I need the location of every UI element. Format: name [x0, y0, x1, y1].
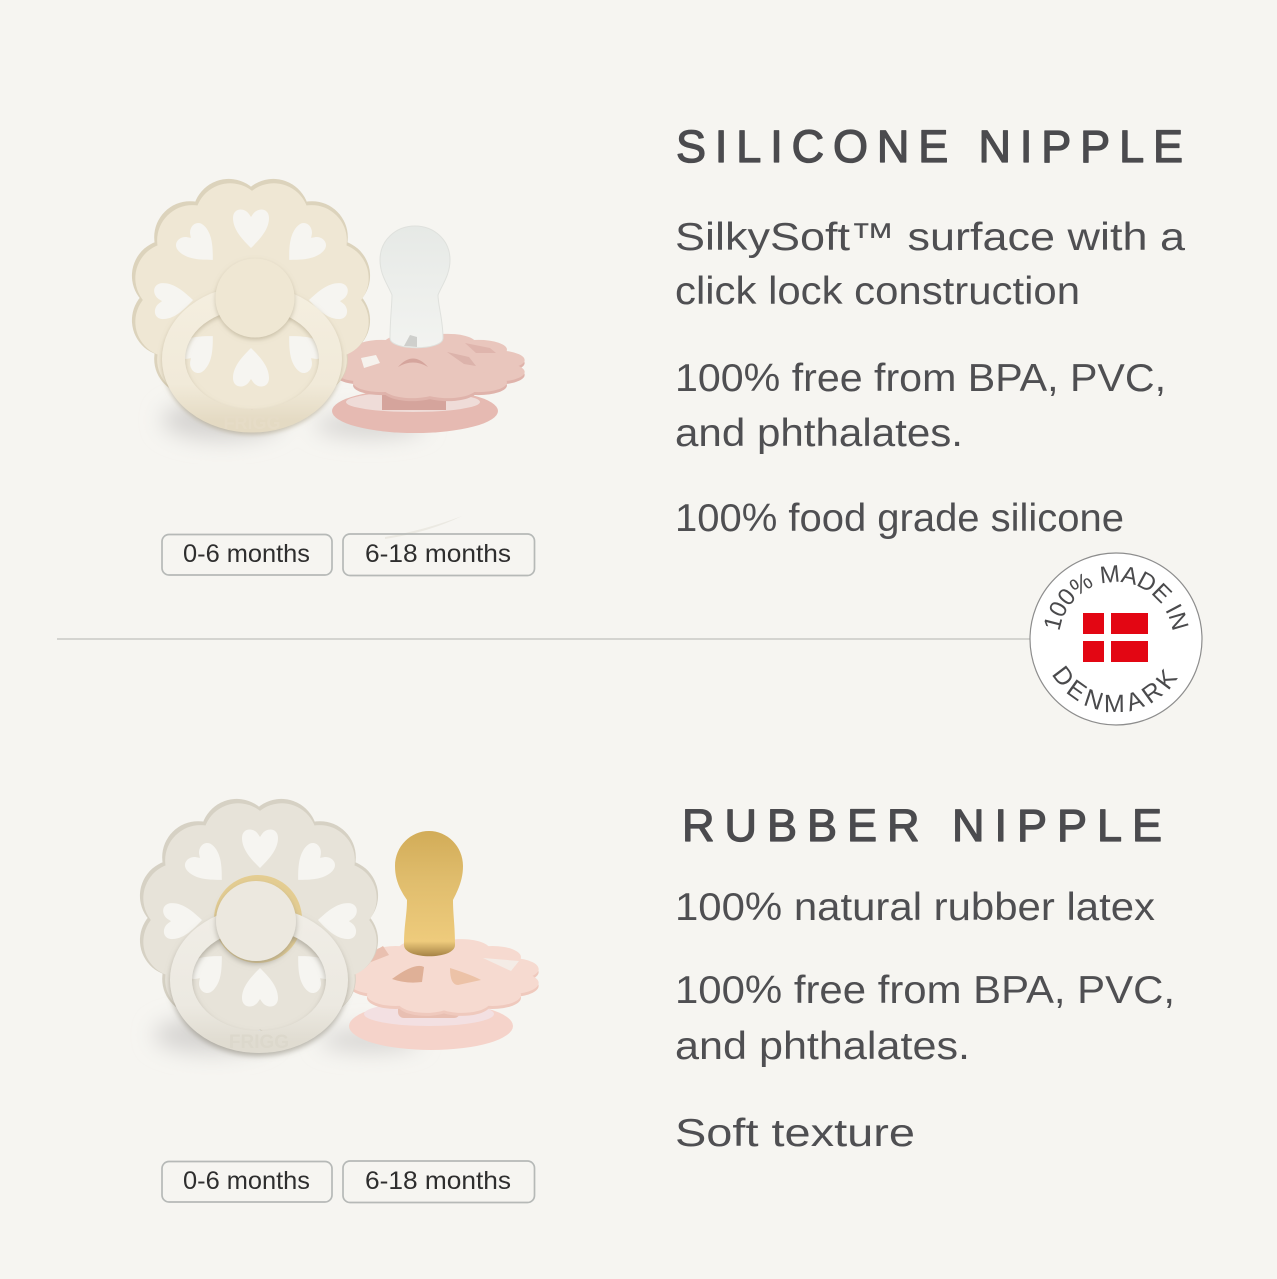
- panel: rubber nipple product: [132, 791, 545, 1053]
- panel: silicone nipple text: [675, 121, 1185, 540]
- heading: SILICONE NIPPLE: [676, 121, 1183, 172]
- faint smudge: [385, 516, 462, 539]
- text: free from: 100% free from BPA, PVC,: [675, 969, 1175, 1012]
- pink pacifier, silicone: [329, 226, 531, 433]
- badge: 100% made in Denmark: [1029, 552, 1203, 726]
- panel: silicone nipple product: [124, 171, 531, 440]
- tag: 6-18 months: [343, 1161, 534, 1202]
- badge top text: 100% MADE IN: [1044, 565, 1188, 630]
- FRIGG logo: FRIGG: [224, 413, 280, 433]
- tag: 0-6 months: 0-6 months: [183, 540, 310, 568]
- text: soft texture: Soft texture: [675, 1112, 915, 1155]
- tag: 0-6 months: [162, 534, 332, 575]
- divider line: [57, 638, 1032, 640]
- text: construction: click lock construction: [675, 270, 1080, 313]
- cream pacifier, rubber: [132, 791, 386, 1053]
- text: phthalates: and phthalates.: [675, 1025, 970, 1068]
- FRIGG logo: FRIGG: [229, 1032, 289, 1053]
- tag: 0-6 months: [162, 1162, 332, 1202]
- icon: Danish flag: [1083, 613, 1148, 662]
- panel: silicone age options: [162, 516, 534, 576]
- badge bottom text: DENMARK: [1052, 666, 1178, 712]
- panel: rubber nipple text: [675, 800, 1175, 1155]
- cream pacifier, silicone: [124, 171, 378, 433]
- text: free from: 100% free from BPA, PVC,: [675, 357, 1166, 400]
- tag: 6-18 months: 6-18 months: [365, 540, 511, 568]
- product shadow: [162, 400, 425, 440]
- tag: 6-18 months: 6-18 months: [365, 1167, 511, 1195]
- text: natural rubber: 100% natural rubber latex: [675, 886, 1156, 929]
- panel: rubber age options: [162, 1161, 534, 1202]
- product shadow: [154, 1017, 420, 1053]
- tag: 0-6 months: 0-6 months: [183, 1167, 310, 1195]
- tag: 6-18 months: [343, 534, 534, 576]
- text: surface: SilkySoft™ surface with a: [675, 216, 1185, 259]
- heading: RUBBER NIPPLE: [682, 800, 1162, 851]
- text: phthalates: and phthalates.: [675, 412, 963, 455]
- pink pacifier, rubber: [343, 831, 545, 1050]
- text: food grade: 100% food grade silicone: [675, 497, 1124, 540]
